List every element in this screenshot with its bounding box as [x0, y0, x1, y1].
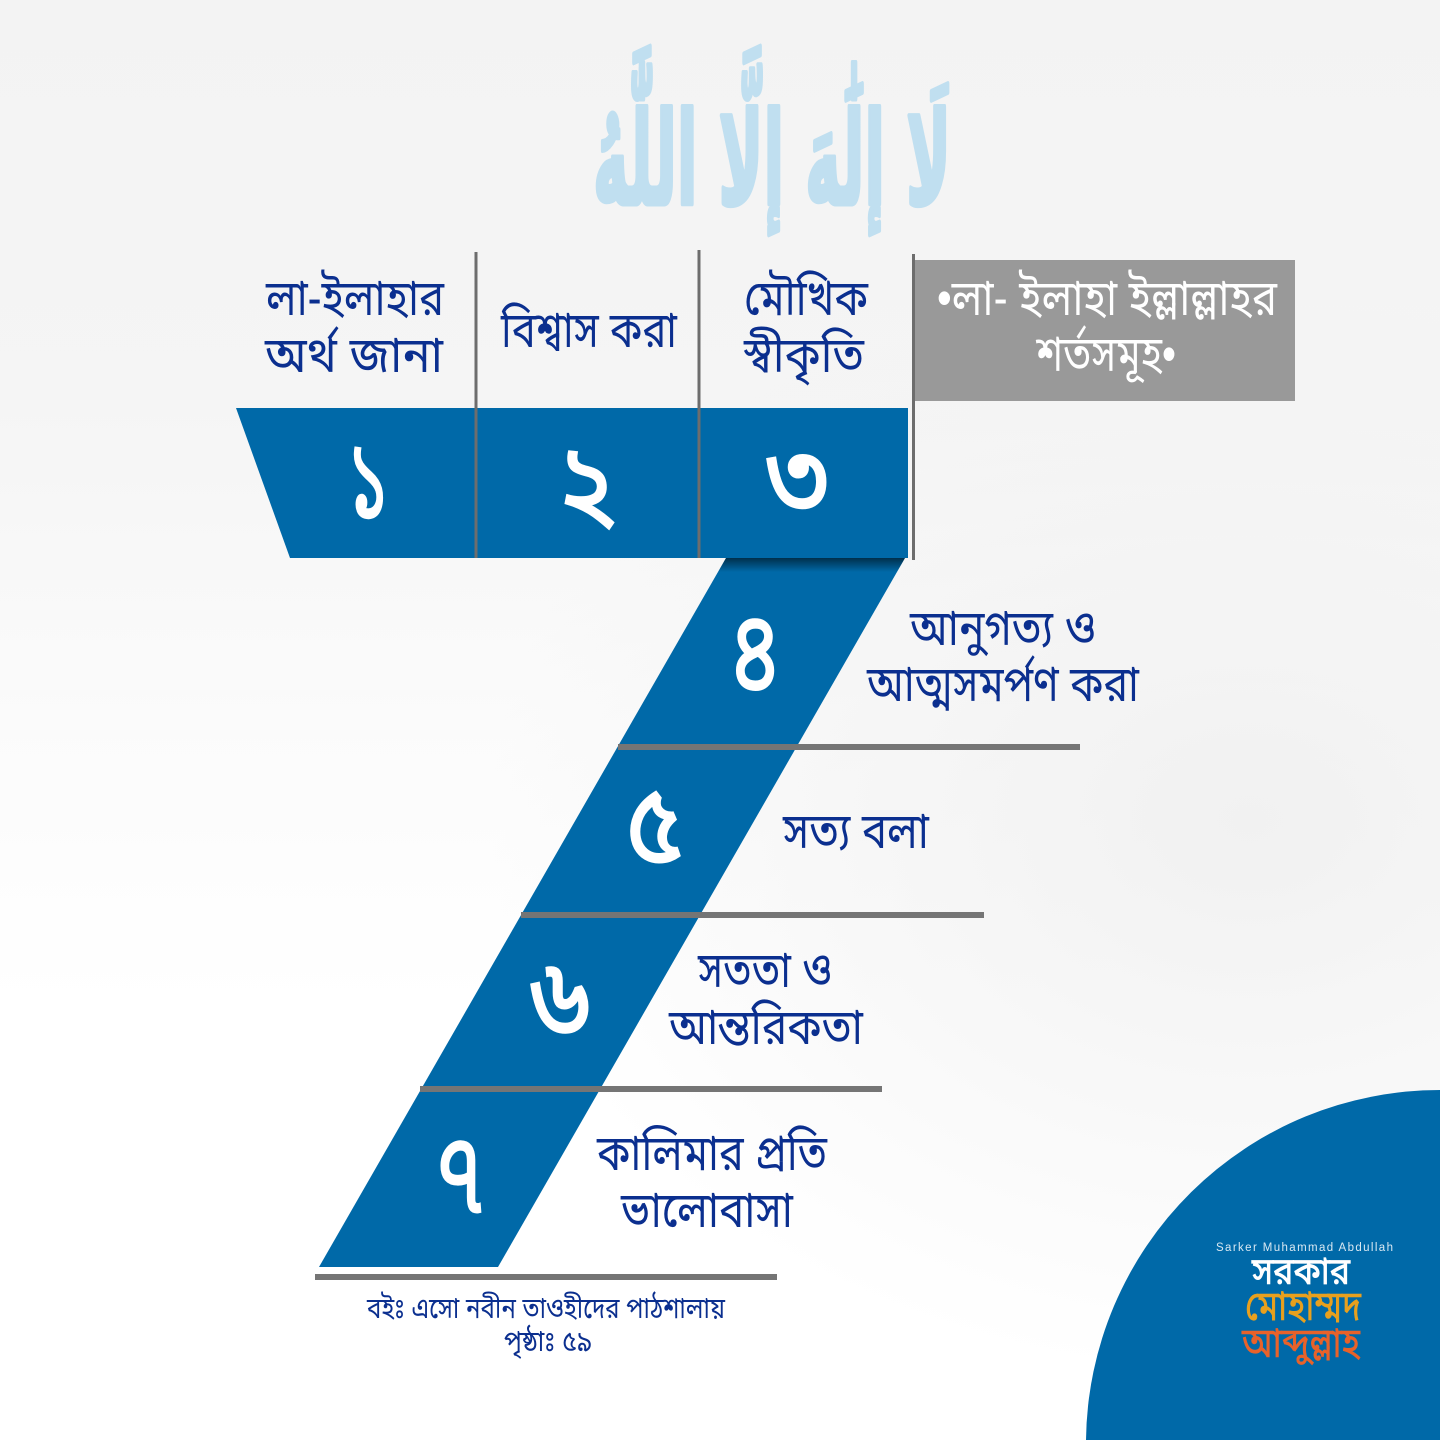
- label 3: মৌখিক: [744, 270, 869, 326]
- source note: [366, 1291, 726, 1359]
- label 6: সততা ও: [697, 942, 832, 998]
- author logo: সরকার: [1251, 1251, 1351, 1293]
- vertical dividers: [476, 250, 914, 560]
- numerals on the seven: ৫: [626, 761, 684, 886]
- numerals on the seven: ৩: [766, 415, 828, 540]
- numerals on the seven: ৬: [530, 936, 590, 1061]
- label 2: বিশ্বাস করা: [500, 302, 678, 358]
- label 1: লা-ইলাহার: [265, 270, 445, 326]
- horizontal rules: [315, 744, 1080, 1280]
- label 7: কালিমার প্রতি: [596, 1124, 828, 1181]
- numerals on the seven: ২: [557, 421, 615, 546]
- panel: diagonal bar of the seven: [319, 558, 905, 1267]
- label 4: [866, 600, 1140, 712]
- text: لَا إلَٰهَ إلَّا اللَّٰهُ: [593, 45, 951, 236]
- numerals on the seven: ৪: [730, 588, 780, 713]
- panel: horizontal bar of the seven: [236, 408, 908, 558]
- label 1: [264, 270, 445, 383]
- author logo: আব্দুল্লাহ: [1241, 1319, 1360, 1366]
- source note: বইঃ এসো নবীন তাওহীদের পাঠশালায়: [366, 1291, 726, 1325]
- source note: পৃষ্ঠাঃ ৫৯: [504, 1324, 592, 1359]
- label 4: আত্মসমর্পণ করা: [866, 655, 1140, 712]
- author logo: মোহাম্মদ: [1245, 1282, 1362, 1329]
- numerals on the seven: ৭: [435, 1110, 485, 1235]
- author logo: [1216, 1242, 1394, 1366]
- heading box: conditions of la ilaha illallah: [915, 260, 1295, 401]
- numerals on the seven: ১: [348, 417, 388, 542]
- author logo: Sarker Muhammad Abdullah: [1216, 1242, 1394, 1254]
- label 5: সত্য বলা: [782, 803, 930, 859]
- heading box: conditions of la ilaha illallah: •লা- ইলাহা ইল্লাল্লাহর: [937, 270, 1278, 326]
- label 7: ভালোবাসা: [620, 1182, 794, 1238]
- label 7: [596, 1124, 828, 1238]
- numerals on the seven: [348, 415, 828, 1235]
- label 6: আন্তরিকতা: [668, 999, 864, 1055]
- label 3: স্বীকৃতি: [743, 327, 865, 386]
- label 6: [668, 942, 864, 1055]
- corner quarter circle: [1086, 1090, 1440, 1440]
- label 3: [743, 270, 869, 386]
- shadow under horizontal bar: [718, 558, 905, 572]
- label 4: আনুগত্য ও: [909, 600, 1096, 657]
- heading box: conditions of la ilaha illallah: শর্তসমূহ•: [1035, 325, 1176, 384]
- label 1: অর্থ জানা: [264, 326, 444, 383]
